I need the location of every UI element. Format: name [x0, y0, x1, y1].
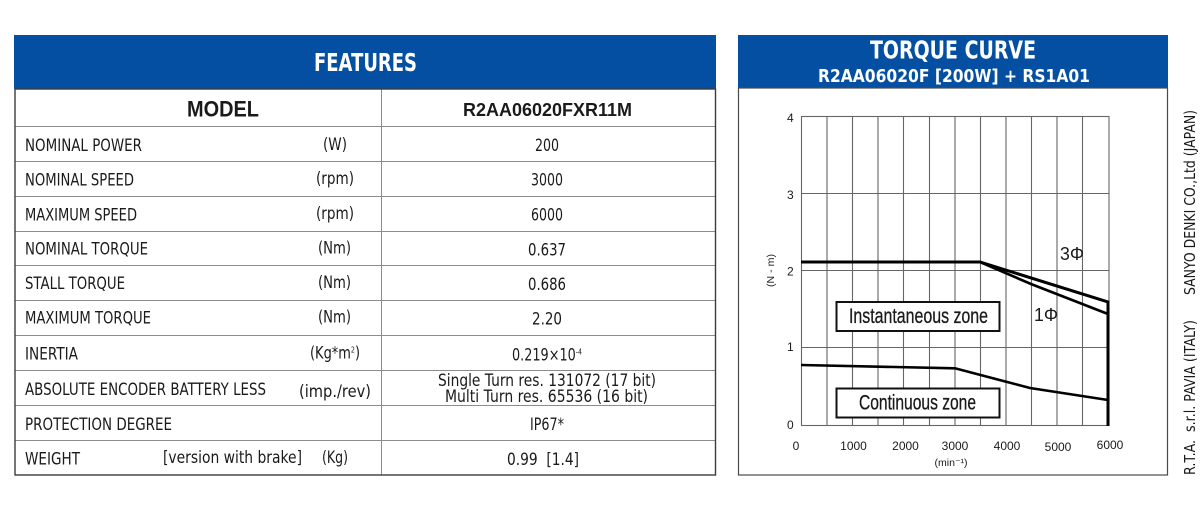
row: nominal speed: (rpm) [316, 169, 354, 188]
row: maximum speed: MAXIMUM SPEED [25, 206, 137, 224]
row: maximum torque: MAXIMUM TORQUE [25, 308, 151, 328]
row: inertia: 2 [351, 346, 355, 354]
heading: torque curve: R2AA06020F [200W] + RS1A01 [818, 66, 1090, 87]
label: continuous zone [836, 388, 1000, 418]
heading: features: FEATURES [314, 48, 417, 77]
table header row: model: MODEL [187, 96, 259, 122]
y axis labels: 2 [787, 264, 794, 278]
table header row: model: R2AA06020FXR11M [463, 100, 632, 120]
row: inertia: ) [355, 344, 360, 362]
table header row: model [187, 96, 632, 122]
x axis labels: 5000 [1045, 440, 1072, 454]
y axis unit: (N - m) [766, 254, 777, 287]
row: weight: (Kg) [322, 448, 348, 467]
row: nominal speed: 3000 [531, 170, 563, 190]
label: 3 phase: 3Φ [1060, 244, 1084, 264]
y axis labels: 1 [787, 340, 794, 354]
label: instantaneous zone [836, 302, 1000, 331]
row: nominal torque: 0.637 [528, 240, 566, 260]
x axis labels [793, 438, 1124, 454]
row: absolute encoder: Single Turn res. 131072 (17 bit) [438, 371, 656, 390]
row: maximum speed: 6000 [531, 206, 563, 224]
row: inertia: -4 [576, 348, 582, 356]
row: stall torque: (Nm) [318, 273, 351, 292]
row: absolute encoder: (imp./rev) [299, 382, 371, 401]
chart: torque vs speed [766, 111, 1124, 469]
row: inertia [25, 344, 582, 364]
row: nominal power: 200 [535, 136, 559, 155]
panel: torque curve [738, 35, 1168, 475]
row: maximum torque: 2.20 [532, 310, 562, 328]
row: absolute encoder [25, 371, 656, 406]
heading: features [14, 35, 716, 89]
row: maximum speed [25, 204, 563, 224]
x axis labels: 0 [793, 439, 800, 453]
curve: 3 phase instantaneous limit [801, 262, 1108, 426]
row: protection degree [25, 415, 564, 434]
row: nominal torque: (Nm) [318, 238, 351, 258]
x axis labels: 3000 [942, 439, 969, 453]
side credit: manufacturer: SANYO DENKI CO.,Ltd (JAPAN) [1181, 110, 1199, 295]
row: weight: [version with brake] [163, 448, 302, 467]
side credit: distributor: R.T.A. s.r.l. PAVIA (ITALY) [1181, 320, 1199, 475]
label: instantaneous zone: Instantaneous zone [849, 304, 988, 328]
row: nominal speed [25, 169, 563, 190]
row: absolute encoder: Multi Turn res. 65536 (16 bit) [445, 387, 648, 406]
row: maximum torque [25, 308, 562, 328]
curve: continuous limit [801, 365, 1108, 400]
row: nominal power: (W) [323, 135, 347, 154]
row: inertia: INERTIA [25, 344, 79, 364]
row: weight: 0.99 [1.4] [507, 450, 579, 469]
x axis unit: (min⁻¹) [934, 458, 968, 469]
row: absolute encoder: ABSOLUTE ENCODER BATTERY LESS [25, 380, 266, 399]
label: 1 phase: 1Φ [1034, 305, 1058, 325]
x axis labels: 2000 [892, 439, 919, 453]
heading: torque curve [738, 35, 1168, 88]
x axis labels: 4000 [994, 439, 1021, 453]
heading: torque curve: TORQUE CURVE [870, 36, 1036, 64]
row: nominal torque [25, 238, 566, 260]
curve: 1 phase instantaneous limit [980, 262, 1108, 314]
y axis labels: 3 [787, 188, 794, 202]
row: nominal power [25, 135, 559, 155]
row: weight: WEIGHT [25, 450, 81, 468]
panel: features table [14, 35, 716, 475]
label: continuous zone: Continuous zone [859, 390, 976, 414]
row: inertia: (Kg*m [310, 344, 362, 362]
row: weight [25, 448, 579, 469]
row: protection degree: PROTECTION DEGREE [25, 415, 172, 434]
row: maximum speed: (rpm) [316, 204, 354, 223]
row: maximum torque: (Nm) [318, 308, 351, 326]
row: nominal torque: NOMINAL TORQUE [25, 240, 148, 258]
row: stall torque: STALL TORQUE [25, 274, 125, 293]
row: inertia: 0.219×10 [512, 346, 594, 364]
y axis labels: 0 [787, 418, 794, 432]
row: protection degree: IP67* [530, 415, 564, 434]
row: stall torque [25, 273, 566, 294]
y axis labels: 4 [787, 111, 794, 125]
row: nominal power: NOMINAL POWER [25, 136, 142, 155]
x axis labels: 6000 [1097, 438, 1124, 452]
row: stall torque: 0.686 [528, 275, 566, 294]
row: nominal speed: NOMINAL SPEED [25, 170, 134, 190]
y axis labels [787, 111, 794, 432]
x axis labels: 1000 [840, 439, 867, 453]
